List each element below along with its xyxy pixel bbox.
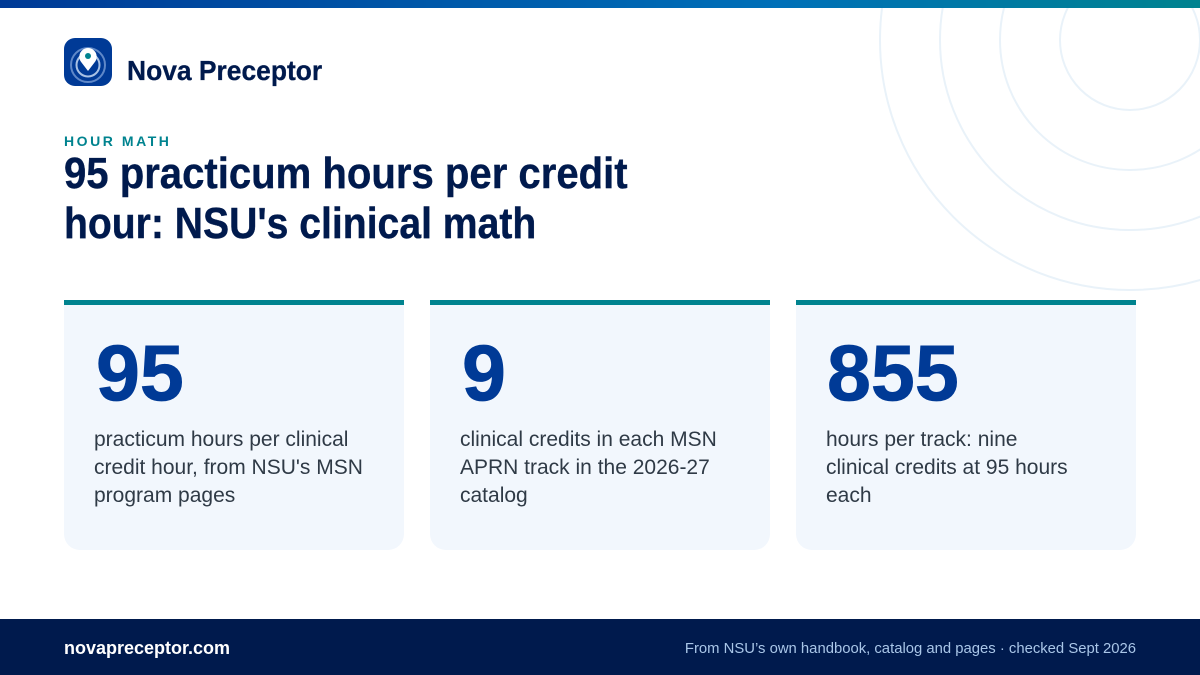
title: hour: NSU's clinical math — [64, 199, 536, 248]
description — [826, 428, 1068, 507]
description: clinical credits in each MSN — [460, 428, 717, 451]
stat: 855: 855 — [827, 328, 959, 417]
description — [460, 428, 717, 507]
description: program pages — [94, 484, 235, 507]
description: APRN track in the 2026-27 — [460, 456, 710, 479]
card: 9 clinical credits — [430, 300, 770, 550]
description: hours per track: nine — [826, 428, 1017, 451]
footer band — [0, 619, 1200, 675]
concentric ring decoration — [879, 8, 1200, 291]
description: credit hour, from NSU's MSN — [94, 456, 363, 479]
title: 95 practicum hours per credit — [64, 149, 628, 198]
stat: 95: 95 — [96, 328, 184, 417]
card: 95 practicum hours — [64, 300, 404, 550]
description: each — [826, 484, 872, 507]
brand name: Nova Preceptor — [127, 55, 322, 86]
top gradient bar — [0, 0, 1200, 8]
description: catalog — [460, 484, 528, 507]
footer source note: From NSU’s own handbook, catalog and pages · checked Sept 2026 — [685, 641, 1136, 657]
description — [94, 428, 363, 507]
stat: 9: 9 — [462, 328, 506, 417]
description: clinical credits at 95 hours — [826, 456, 1068, 479]
footer site name: novapreceptor.com — [64, 638, 230, 658]
description: practicum hours per clinical — [94, 428, 348, 451]
logo icon: map pin with rings — [64, 38, 112, 86]
title — [64, 149, 628, 248]
card: 855 hours per track — [796, 300, 1136, 550]
eyebrow label: HOUR MATH — [64, 133, 171, 149]
